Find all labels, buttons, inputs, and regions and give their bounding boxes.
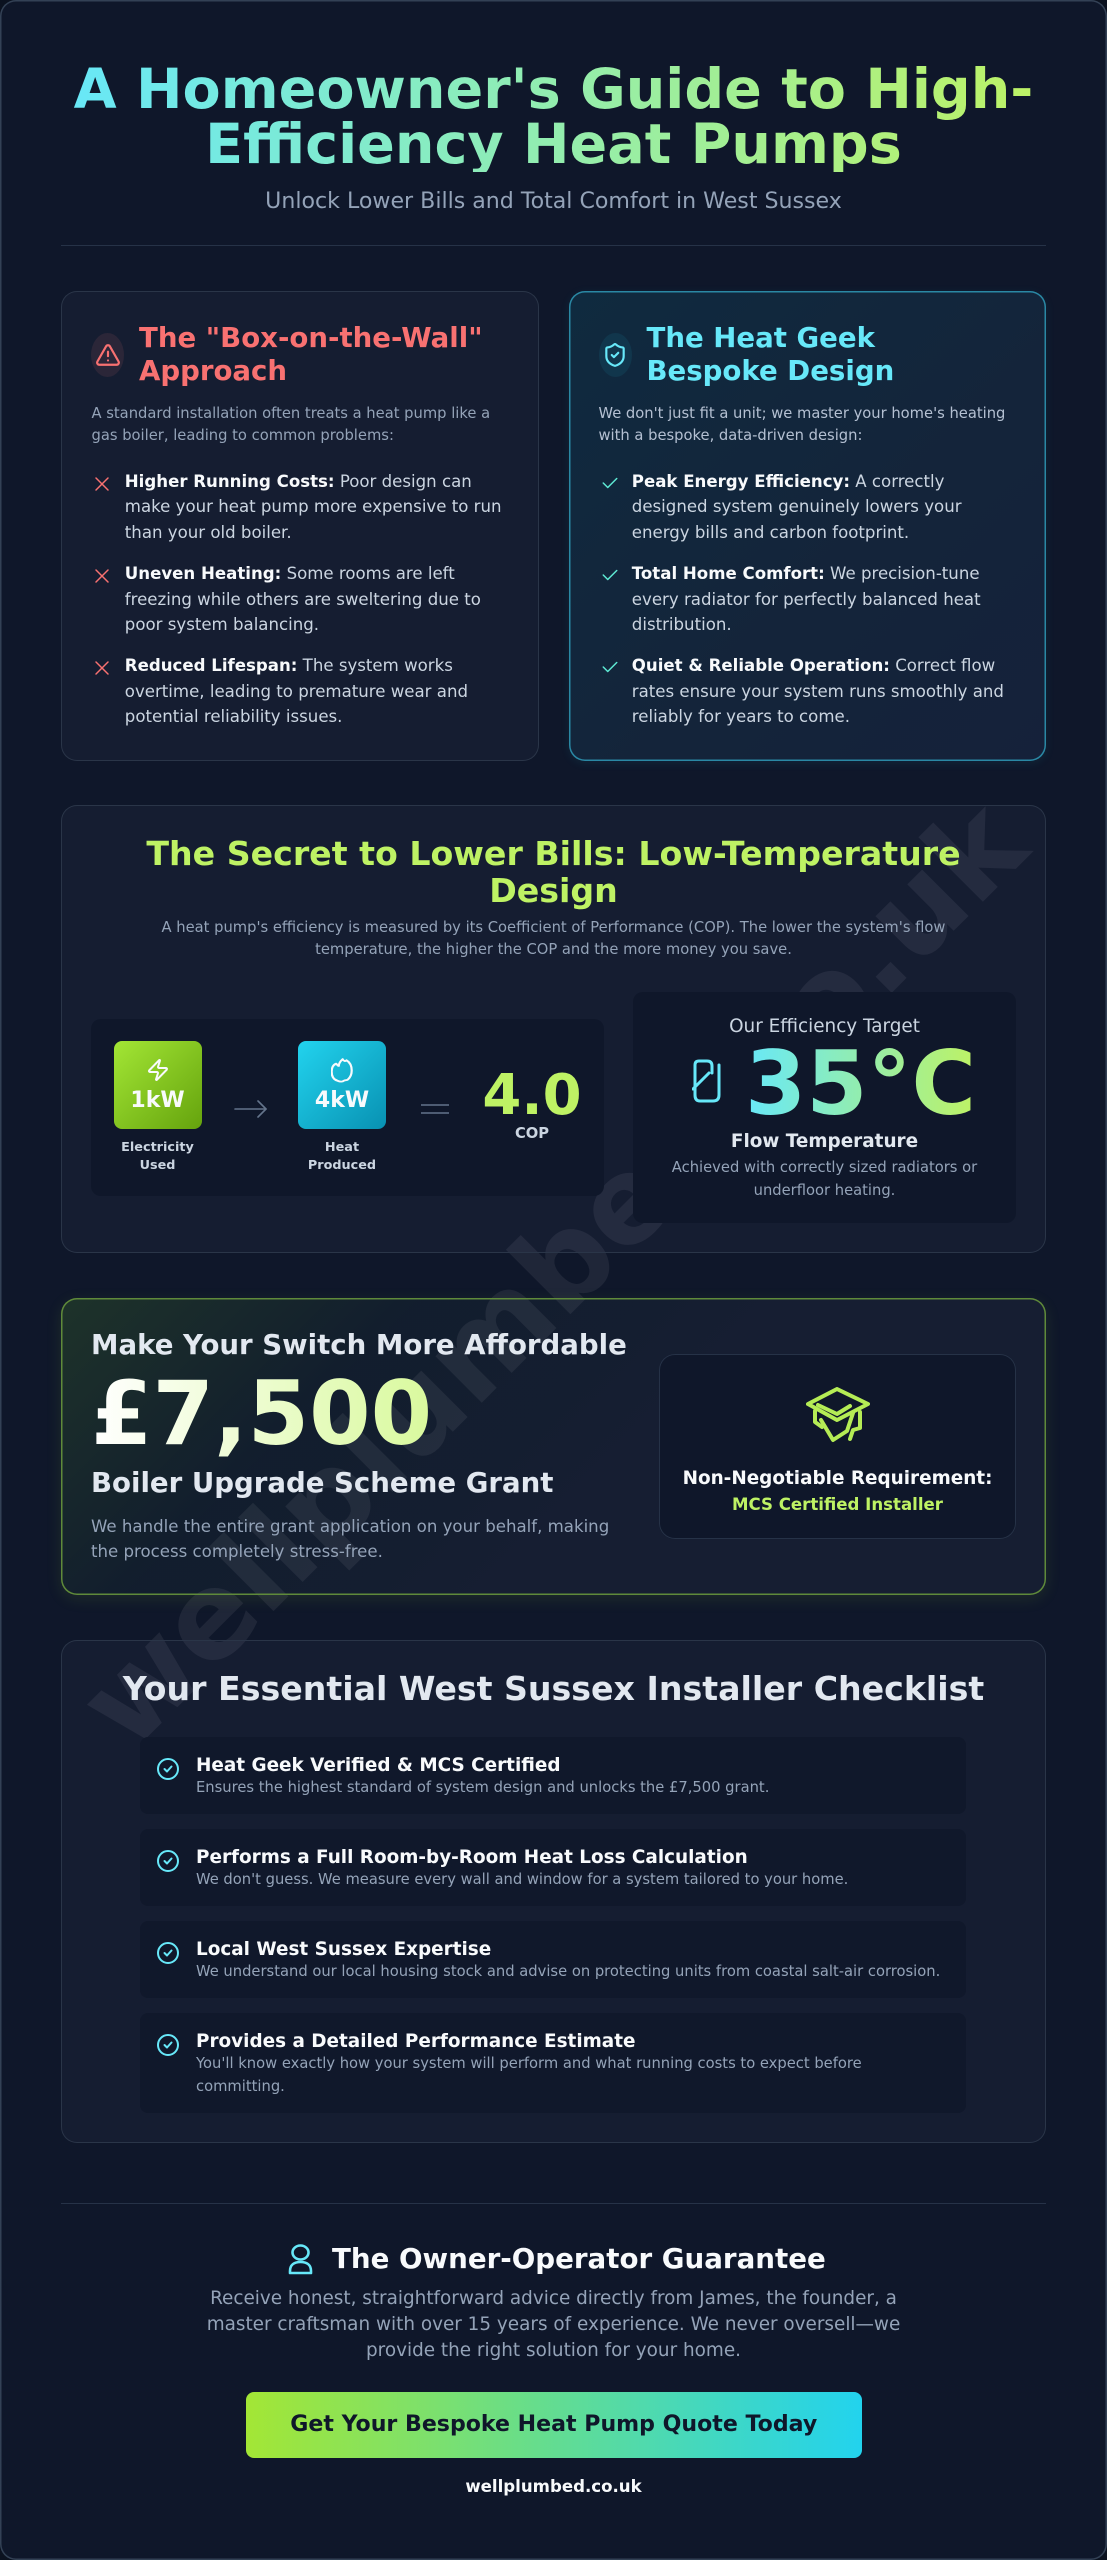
grant name: Boiler Upgrade Scheme Grant (91, 1466, 553, 1498)
grant note: the process completely stress-free. (91, 1542, 383, 1561)
checklist item 1: Heat Geek Verified & MCS Certified (196, 1755, 561, 1776)
target note (672, 1159, 978, 1199)
subtitle: Unlock Lower Bills and Total Comfort in West Sussex (265, 188, 842, 214)
COP equation (91, 1019, 604, 1196)
explanation text (162, 919, 945, 958)
benefit: quiet operation: rates ensure your system runs smoothly and (632, 682, 1004, 701)
checklist item 1: Ensures the highest standard of system design and unlocks the £7,500 grant. (196, 1779, 769, 1796)
heading: The Heat Geek (646, 321, 875, 354)
checklist item 4: committing. (196, 2078, 285, 2095)
MCS text: MCS Certified Installer (732, 1495, 943, 1514)
checklist item 1 (140, 1737, 966, 1814)
explanation text: temperature, the higher the COP and the more money you save. (315, 941, 792, 958)
guarantee text (207, 2288, 900, 2361)
problem: reduced lifespan (95, 656, 468, 726)
problem: uneven heating: freezing while others are sweltering due to (125, 590, 481, 609)
problem: running costs (95, 472, 502, 542)
label: heat produced (308, 1140, 376, 1173)
requirement box (659, 1354, 1016, 1539)
tile: heat produced: 4kW (315, 1088, 369, 1113)
problem: running costs: than your old boiler. (125, 523, 292, 542)
heading (139, 321, 483, 387)
checklist item 2: We don't guess. We measure every wall and window for a system tailored to your home. (196, 1871, 848, 1888)
checklist item 3 (140, 1921, 966, 1998)
icon: warning triangle (91, 333, 124, 377)
grant note (91, 1517, 609, 1561)
panel: installer checklist (61, 1640, 1046, 2143)
benefit: peak efficiency: designed system genuinely lowers your (632, 497, 962, 516)
heading: Approach (139, 354, 287, 387)
panel: box-on-the-wall approach (61, 291, 538, 761)
target label: Our Efficiency Target (729, 1016, 920, 1037)
target note: Achieved with correctly sized radiators or (672, 1159, 977, 1176)
call to action button (246, 2392, 862, 2458)
efficiency target (633, 992, 1016, 1223)
problem: reduced lifespan: overtime, leading to premature wear and (125, 682, 468, 701)
watermark: wellplumbed.co.uk (53, 775, 1053, 1775)
benefit: total comfort: every radiator for perfectly balanced heat (632, 590, 981, 609)
checklist item 2 (140, 1829, 966, 1906)
heading (646, 321, 894, 387)
tile: heat produced (298, 1041, 386, 1129)
problem: uneven heating: poor system balancing. (125, 615, 319, 634)
checklist item 2: Performs a Full Room-by-Room Heat Loss Calculation (196, 1847, 748, 1868)
benefit: quiet operation: Quiet & Reliable Operation: Correct flow (632, 656, 995, 675)
problem: reduced lifespan: Reduced Lifespan: The system works (125, 656, 453, 675)
checklist item 3: We understand our local housing stock and advise on protecting units from coastal salt-air corrosion. (196, 1963, 940, 1980)
grant note: We handle the entire grant application on your behalf, making (91, 1517, 609, 1536)
COP label: COP (515, 1125, 549, 1142)
checklist item 4 (140, 2013, 966, 2113)
target note: underfloor heating. (754, 1182, 895, 1199)
heading: The "Box-on-the-Wall" (139, 321, 483, 354)
benefit: peak efficiency: energy bills and carbon footprint. (632, 523, 909, 542)
heading: Bespoke Design (646, 354, 894, 387)
grant heading: Make Your Switch More Affordable (91, 1328, 627, 1361)
label: electricity used: Used (140, 1158, 175, 1173)
tile: electricity used: 1kW (130, 1088, 185, 1113)
panel: grant (61, 1298, 1046, 1595)
panel: low-temperature design (61, 805, 1046, 1253)
panel: heat geek bespoke design (568, 291, 1046, 761)
guarantee heading: The Owner-Operator Guarantee (332, 2242, 826, 2275)
benefit: total comfort: Total Home Comfort: We precision-tune (632, 564, 980, 583)
benefit: quiet operation (602, 656, 1004, 726)
arrow (234, 1100, 267, 1118)
intro text: A standard installation often treats a heat pump like a (92, 405, 490, 422)
icon: shield check (598, 333, 632, 377)
explanation text: A heat pump's efficiency is measured by its Coefficient of Performance (COP). The lower the system's flow (162, 919, 945, 936)
problem: running costs: make your heat pump more expensive to run (125, 497, 502, 516)
call to action button: Get Your Bespoke Heat Pump Quote Today (290, 2412, 817, 2437)
intro text: gas boiler, leading to common problems: (92, 427, 394, 444)
label: electricity used (121, 1140, 194, 1173)
heading: The Secret to Lower Bills: Low-Temperature (146, 834, 961, 873)
temperature value: 35°C (745, 1032, 976, 1134)
tile: electricity used (114, 1041, 202, 1129)
checklist item 3: Local West Sussex Expertise (196, 1939, 491, 1960)
website: wellplumbed.co.uk (465, 2477, 642, 2496)
label: heat produced: Heat (325, 1140, 359, 1155)
heading (146, 834, 961, 910)
title: A Homeowner's Guide to High- (74, 57, 1033, 122)
icon: thermometer (692, 1060, 720, 1102)
title: Efficiency Heat Pumps (205, 112, 902, 177)
guarantee text: provide the right solution for your home. (366, 2340, 741, 2361)
heading: Your Essential West Sussex Installer Checklist (123, 1669, 984, 1708)
title (61, 62, 1046, 172)
icon: graduation cap (806, 1387, 870, 1442)
icon: person (288, 2244, 312, 2274)
intro text (92, 405, 490, 444)
problem: reduced lifespan: potential reliability issues. (125, 707, 342, 726)
benefit: total comfort (602, 564, 981, 634)
benefit: total comfort: distribution. (632, 615, 732, 634)
benefit: peak efficiency (602, 472, 962, 542)
requirement text: Non-Negotiable Requirement: (683, 1468, 992, 1489)
problem: uneven heating: Uneven Heating: Some rooms are left (125, 564, 455, 583)
intro text (598, 405, 1005, 444)
benefit: quiet operation: reliably for years to come. (632, 707, 850, 726)
guarantee text: Receive honest, straightforward advice directly from James, the founder, a (210, 2288, 897, 2309)
grant amount: £7,500 (91, 1362, 432, 1464)
label: heat produced: Produced (308, 1158, 376, 1173)
guarantee text: master craftsman with over 15 years of experience. We never oversell—we (207, 2314, 900, 2335)
checklist item 4: Provides a Detailed Performance Estimate (196, 2031, 635, 2052)
problem: uneven heating (95, 564, 481, 634)
COP value: 4.0 (482, 1062, 582, 1128)
heading: Design (489, 871, 618, 910)
label: electricity used: Electricity (121, 1140, 194, 1155)
intro text: We don't just fit a unit; we master your home's heating (598, 405, 1005, 422)
checklist item 4: You'll know exactly how your system will perform and what running costs to expect before (196, 2055, 862, 2072)
benefit: peak efficiency: Peak Energy Efficiency: A correctly (632, 472, 944, 491)
flow temperature label: Flow Temperature (731, 1131, 918, 1152)
equals sign (421, 1104, 449, 1114)
problem: running costs: Higher Running Costs: Poor design can (125, 472, 472, 491)
intro text: with a bespoke, data-driven design: (598, 427, 862, 444)
